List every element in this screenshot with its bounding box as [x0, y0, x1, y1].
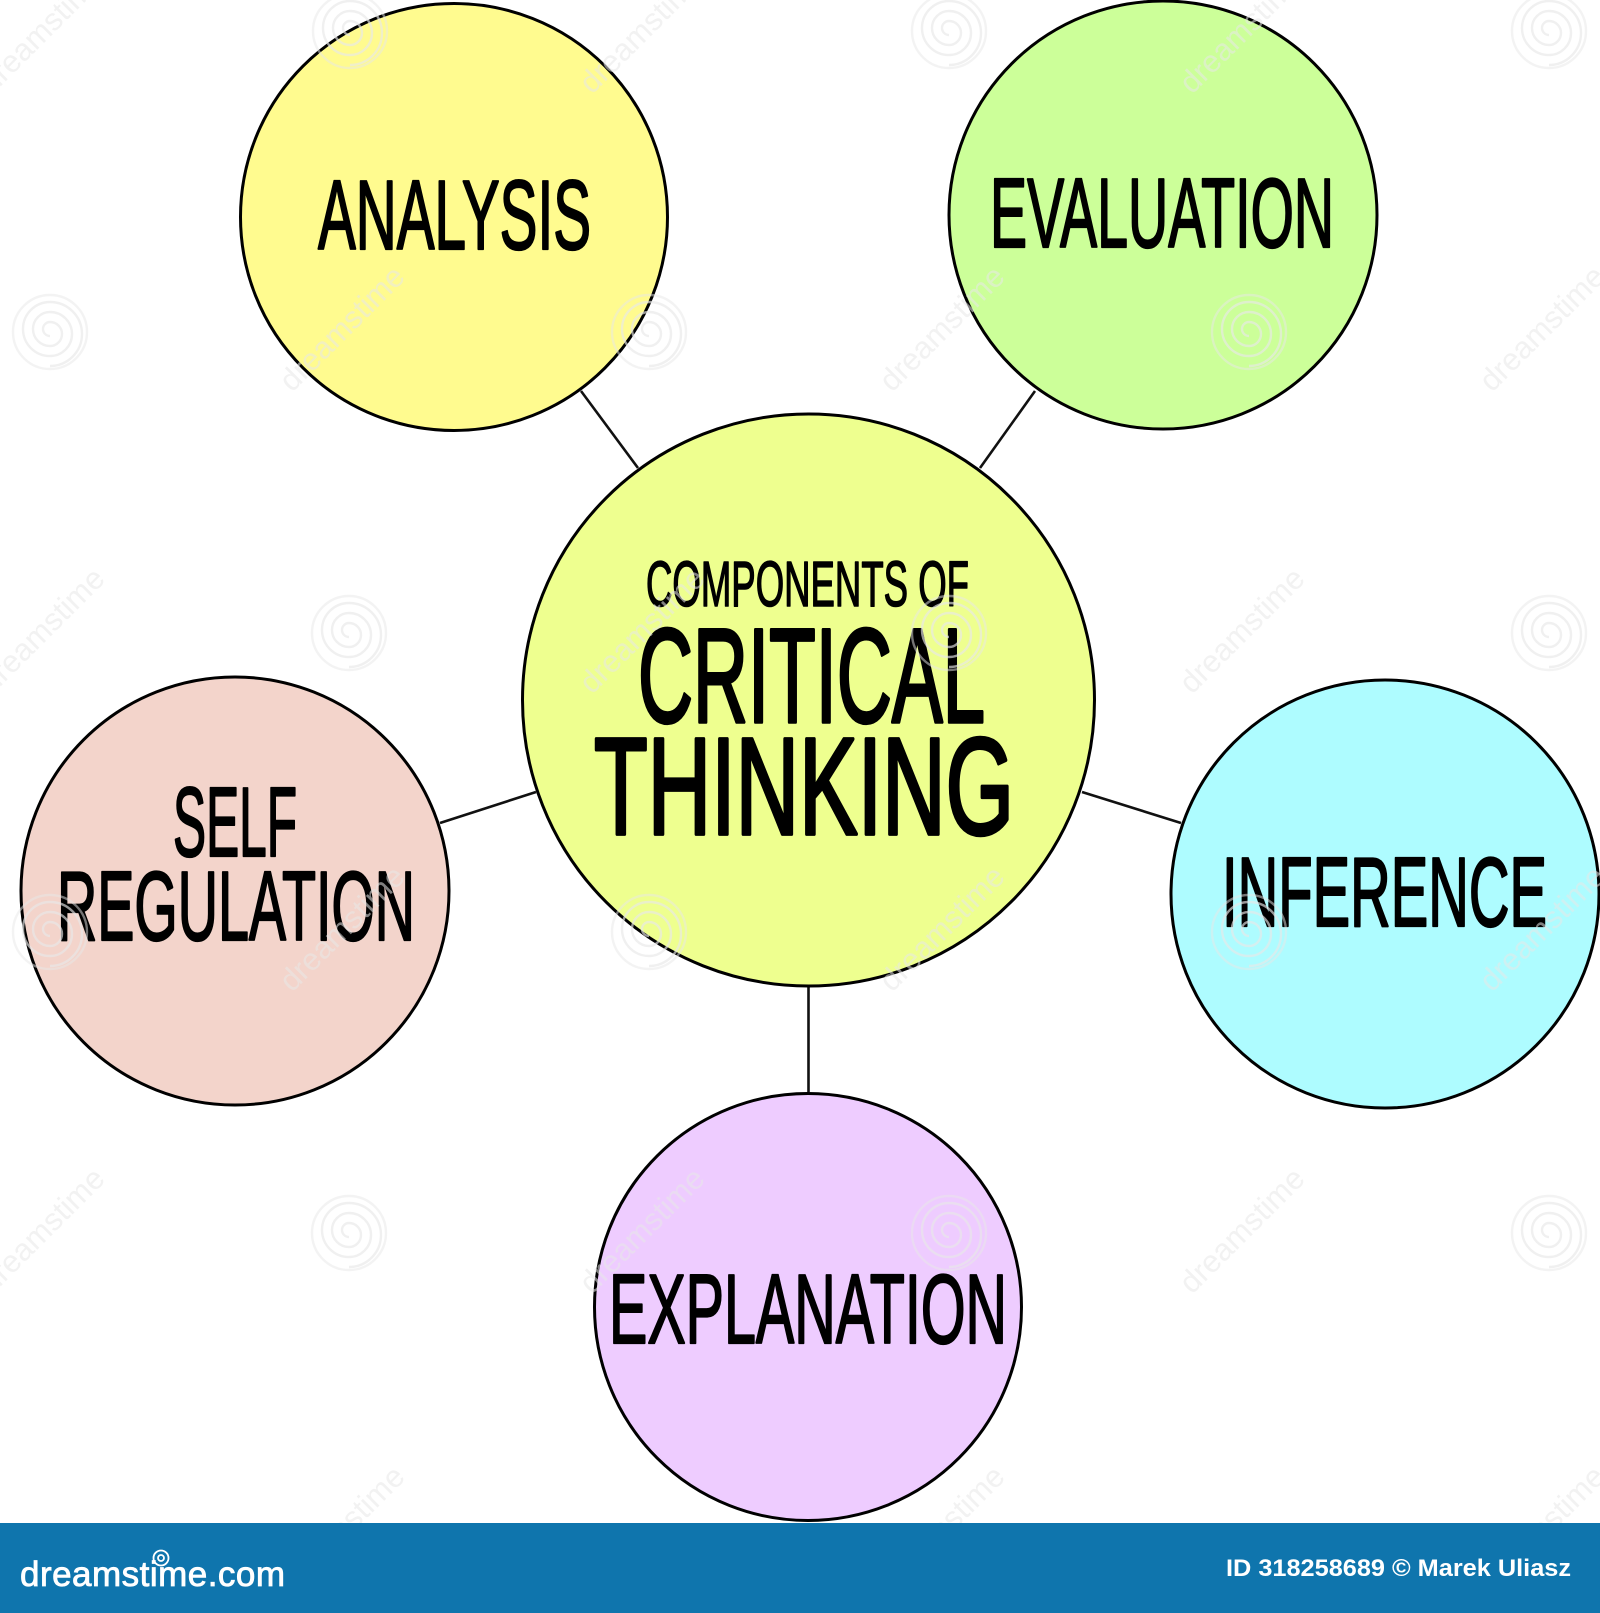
title: thinking: THINKING: [594, 710, 1014, 864]
watermark pattern: dreamstime: [272, 1459, 411, 1598]
panel: self regulation: REGULATION: [57, 851, 415, 961]
panel: self regulation: [21, 677, 449, 1105]
panel: self regulation: SELF: [173, 767, 297, 877]
connector: explanation: [807, 986, 810, 1092]
panel: analysis: ANALYSIS: [318, 160, 591, 270]
panel: inference: [1171, 680, 1599, 1108]
watermark pattern: dreamstime: [872, 259, 1011, 398]
watermark pattern: dreamstime: [572, 1161, 711, 1300]
watermark pattern: dreamstime: [872, 859, 1011, 998]
title: critical: CRITICAL: [638, 602, 985, 751]
connector: analysis: [581, 391, 638, 468]
watermark pattern: dreamstime: [872, 1459, 1011, 1598]
watermark pattern: dreamstime: [1172, 561, 1311, 700]
footer bar: [0, 1523, 1600, 1613]
watermark pattern: dreamstime: [272, 859, 411, 998]
title: components of: COMPONENTS OF: [646, 548, 969, 620]
connector: inference: [1082, 792, 1181, 823]
panel: central topic: [522, 414, 1094, 986]
watermark pattern: dreamstime: [272, 259, 411, 398]
connector: evaluation: [980, 391, 1035, 468]
watermark pattern: dreamstime: [572, 561, 711, 700]
footer logo spiral: [154, 1550, 168, 1566]
panel: analysis: [240, 4, 668, 430]
panel: explanation: EXPLANATION: [609, 1254, 1007, 1364]
connector: self regulation: [440, 792, 536, 823]
footer credit: ID 318258689 © Marek Uliasz: [1226, 1555, 1571, 1582]
panel: evaluation: EVALUATION: [990, 158, 1334, 268]
panel: evaluation: [949, 1, 1377, 429]
footer logo: dreamstime.com: [20, 1555, 285, 1594]
watermark pattern: dreamstime: [1172, 1161, 1311, 1300]
panel: explanation: [594, 1094, 1022, 1520]
